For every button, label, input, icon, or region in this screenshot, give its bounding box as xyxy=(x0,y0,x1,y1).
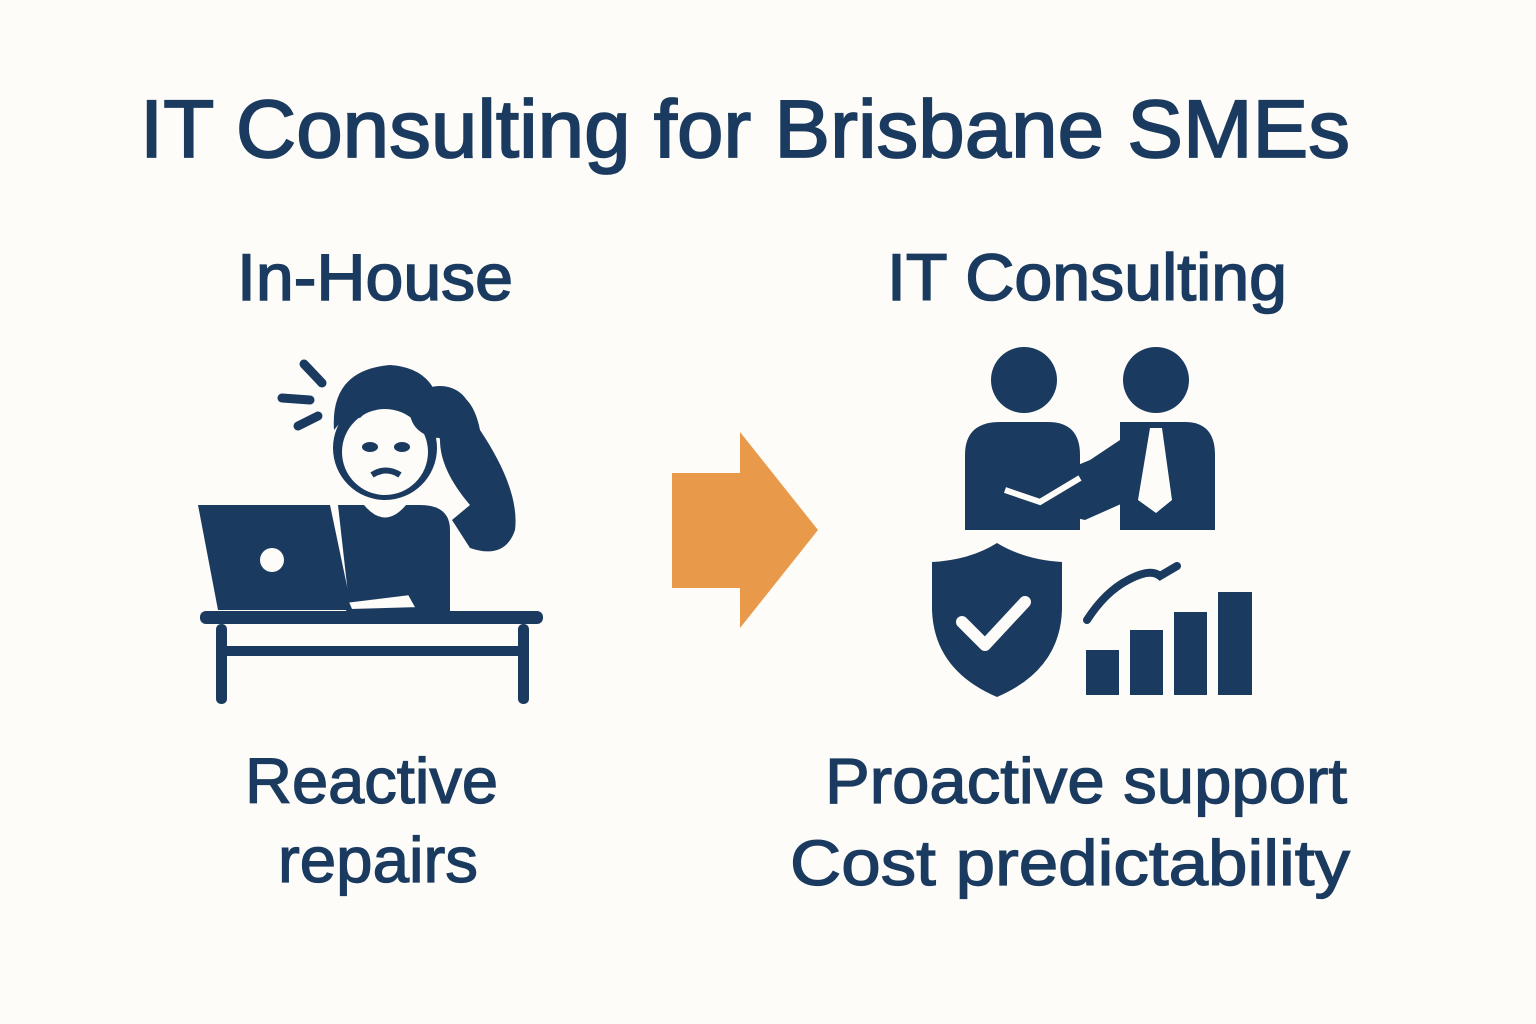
icon: consultants handshake xyxy=(965,347,1215,530)
text: in-house outcome xyxy=(245,745,498,896)
icon: stressed person at laptop xyxy=(198,364,543,704)
icon: growth bar chart xyxy=(1086,566,1252,695)
text: consulting benefits: Proactive support xyxy=(825,745,1347,817)
text: in-house outcome: Reactive xyxy=(245,745,498,817)
text: consulting benefits xyxy=(790,745,1350,899)
laptop xyxy=(198,505,352,610)
arrow xyxy=(672,432,818,628)
text: consulting benefits: Cost predictability xyxy=(790,827,1350,899)
raised arm xyxy=(430,392,516,551)
head xyxy=(333,396,437,500)
heading: in-house: In-House xyxy=(237,240,513,314)
hand on head xyxy=(410,386,470,438)
heading: it consulting: IT Consulting xyxy=(887,240,1287,314)
text: in-house outcome: repairs xyxy=(278,824,478,896)
icon: shield with check xyxy=(932,543,1062,697)
desk xyxy=(200,611,543,624)
stress marks xyxy=(282,364,322,426)
body xyxy=(338,505,450,612)
title: IT Consulting for Brisbane SMEs xyxy=(140,84,1350,175)
